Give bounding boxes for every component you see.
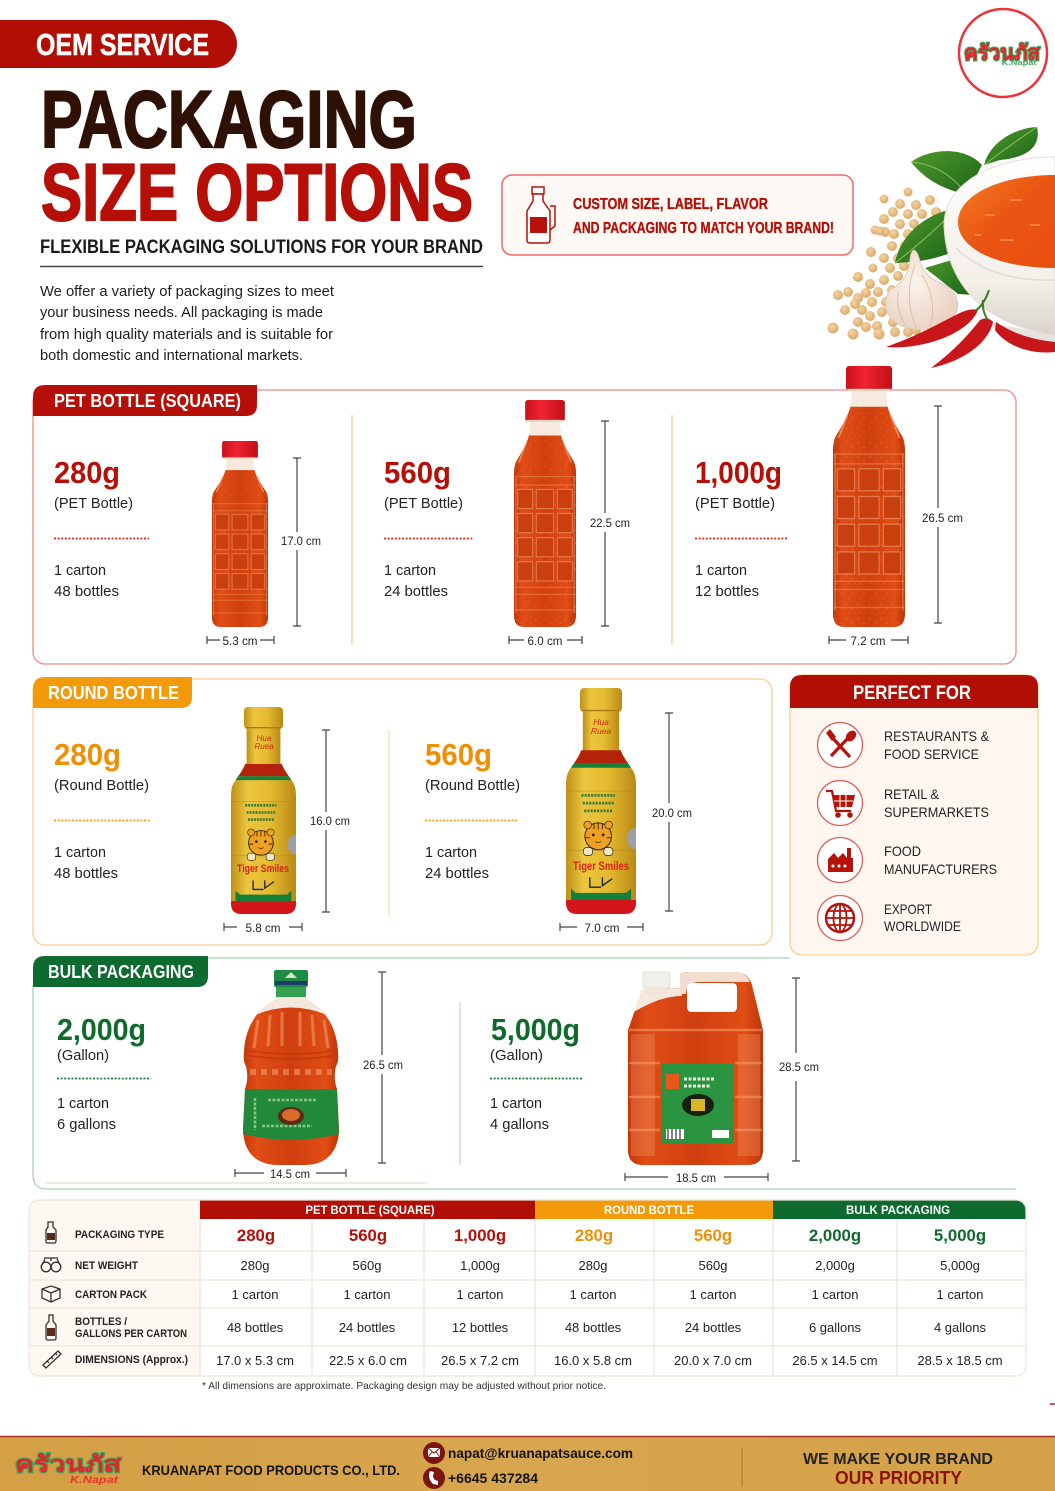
text block: 5000g: 5,000g	[491, 1012, 580, 1047]
tab: bulk heading	[33, 956, 208, 987]
bottle: round 560g: Tiger Smiles	[573, 859, 629, 873]
text: factory: FOOD	[884, 843, 921, 859]
bottle: round 560g: Hua	[593, 717, 609, 727]
carton pack row: 1 carton	[344, 1287, 390, 1302]
carton pack row: 1 carton	[232, 1287, 278, 1302]
dimensions: 5000g: 28.5 cm	[779, 1060, 819, 1074]
text block: PET 560g	[384, 455, 474, 600]
leaves	[895, 127, 1038, 295]
carton pack row: 1 carton	[690, 1287, 736, 1302]
packaging type row: 5,000g	[934, 1226, 986, 1245]
bottles per carton row: 48 bottles	[565, 1320, 622, 1335]
bottle: round 280g: Tiger Smiles	[237, 863, 289, 875]
text block: PET 280g: 1 carton	[54, 562, 106, 579]
text block: round 560g: 24 bottles	[425, 865, 489, 882]
bottles per carton row	[227, 1320, 987, 1335]
packaging type row: 280g	[237, 1226, 275, 1245]
packaging type row: 560g	[349, 1226, 387, 1245]
contact: phone	[423, 1467, 538, 1489]
table headers: ROUND BOTTLE	[604, 1203, 694, 1217]
icon: retail	[818, 780, 862, 826]
dimensions: round 280g: 16.0 cm	[310, 814, 350, 828]
net weight row: 280g	[241, 1258, 269, 1273]
row labels: BOTTLES /	[75, 1316, 127, 1328]
dimensions row: 26.5 x 14.5 cm	[792, 1353, 878, 1368]
row labels: PACKAGING TYPE	[75, 1229, 164, 1241]
dimensions: 280g: 17.0 cm	[281, 534, 321, 548]
dimensions: 560g	[509, 421, 630, 648]
text: restaurants: RESTAURANTS &	[884, 728, 990, 744]
icon: globe	[818, 896, 862, 940]
dimensions: 280g	[207, 458, 321, 648]
tab: PET bottle heading	[33, 385, 257, 416]
dimensions: 560g: 6.0 cm	[528, 634, 562, 648]
row labels: DIMENSIONS (Approx.)	[75, 1354, 188, 1366]
dimensions row: 16.0 x 5.8 cm	[554, 1353, 632, 1368]
dimensions: 2000g	[235, 972, 403, 1181]
bottles per carton row: 48 bottles	[227, 1320, 284, 1335]
badge: OEM service: OEM SERVICE	[36, 27, 209, 62]
text: export: WORLDWIDE	[884, 918, 961, 934]
comparison table	[29, 1200, 1026, 1376]
callout: custom size: AND PACKAGING TO MATCH YOUR BRAND!	[573, 220, 834, 237]
dimensions: 1000g	[829, 406, 963, 648]
text: retail: SUPERMARKETS	[884, 804, 989, 820]
text block: PET 1000g: 1 carton	[695, 562, 747, 579]
carton pack row: 1 carton	[937, 1287, 983, 1302]
heading: perfect for	[790, 675, 1038, 708]
text block: round 560g: (Round Bottle)	[425, 777, 520, 794]
text: restaurants: FOOD SERVICE	[884, 746, 979, 762]
text block: 5000g: 4 gallons	[490, 1116, 549, 1133]
text block: PET 560g: 24 bottles	[384, 583, 448, 600]
bottle: round 280g: Ruea	[254, 742, 274, 751]
dimensions: 5000g	[625, 978, 819, 1185]
illustration: soup bowl with ingredients	[828, 127, 1055, 368]
icon: bottle	[527, 187, 555, 243]
text block: 2000g: 6 gallons	[57, 1116, 116, 1133]
company name: KRUANAPAT FOOD PRODUCTS CO., LTD.	[142, 1462, 400, 1478]
carton pack row: 1 carton	[457, 1287, 503, 1302]
dimensions: 5000g: 18.5 cm	[676, 1171, 716, 1185]
dimensions: 2000g: 14.5 cm	[270, 1167, 310, 1181]
text: restaurants	[884, 728, 990, 762]
logo: round badge: ครัวนภัส	[964, 42, 1040, 65]
carton pack row: 1 carton	[570, 1287, 616, 1302]
intro paragraph: from high quality materials and is suitable for	[40, 326, 333, 343]
dimensions: 560g: 22.5 cm	[590, 516, 630, 530]
bottles per carton row: 6 gallons	[809, 1320, 862, 1335]
packaging type row: 1,000g	[454, 1226, 506, 1245]
contact: email: napat@kruanapatsauce.com	[448, 1445, 633, 1461]
panel: round bottle	[33, 677, 772, 945]
bottles per carton row: 24 bottles	[685, 1320, 742, 1335]
logo: round badge	[959, 9, 1047, 97]
icon: factory	[818, 838, 862, 882]
text: retail: RETAIL &	[884, 786, 940, 802]
row labels	[75, 1229, 188, 1366]
title: SIZE OPTIONS	[41, 148, 473, 238]
contact: phone: +6645 437284	[448, 1470, 538, 1486]
text block: PET 1000g: (PET Bottle)	[695, 495, 775, 512]
bottles per carton row: 12 bottles	[452, 1320, 509, 1335]
text: retail	[884, 786, 989, 820]
footer	[0, 1436, 1055, 1491]
panel: bulk packaging	[33, 956, 1016, 1189]
subtitle: FLEXIBLE PACKAGING SOLUTIONS FOR YOUR BRAND	[40, 237, 483, 258]
row icons	[41, 1222, 61, 1368]
row labels: CARTON PACK	[75, 1289, 147, 1301]
text block: round 280g: 280g	[54, 737, 121, 772]
text: export	[884, 901, 961, 934]
text block: 5000g	[490, 1012, 582, 1133]
text block: 2000g	[57, 1012, 151, 1133]
callout: custom size: CUSTOM SIZE, LABEL, FLAVOR	[573, 196, 768, 213]
panel: PET bottle (square)	[33, 366, 1016, 664]
intro paragraph	[40, 283, 335, 364]
text block: PET 560g: 560g	[384, 455, 451, 490]
intro paragraph: your business needs. All packaging is made	[40, 304, 323, 321]
dimensions row	[216, 1353, 1003, 1368]
bottle: 5000g jug	[628, 972, 763, 1165]
text block: round 280g: 48 bottles	[54, 865, 118, 882]
text block: 2000g: 1 carton	[57, 1095, 109, 1112]
logo: footer: ครัวนภัส	[15, 1451, 122, 1477]
title: PACKAGING	[41, 75, 417, 165]
chilies	[886, 309, 1055, 368]
dimensions row: 26.5 x 7.2 cm	[441, 1353, 519, 1368]
dimensions row: 17.0 x 5.3 cm	[216, 1353, 294, 1368]
dimensions row: 28.5 x 18.5 cm	[917, 1353, 1003, 1368]
text block: round 280g: (Round Bottle)	[54, 777, 149, 794]
row labels: GALLONS PER CARTON	[75, 1328, 187, 1340]
title	[41, 75, 473, 238]
bottle: round 280g	[231, 707, 296, 914]
peas	[828, 188, 941, 340]
text block: 2000g: 2,000g	[57, 1012, 146, 1047]
net weight row: 280g	[579, 1258, 607, 1273]
tab: round bottle heading: ROUND BOTTLE	[48, 683, 179, 703]
dimensions row: 20.0 x 7.0 cm	[674, 1353, 752, 1368]
dimensions: round 280g: 5.8 cm	[246, 921, 280, 935]
text block: round 280g	[54, 737, 150, 882]
text block: PET 280g: 48 bottles	[54, 583, 119, 600]
packaging type row	[237, 1226, 986, 1245]
bowl	[985, 322, 1055, 347]
intro paragraph: both domestic and international markets.	[40, 347, 303, 364]
dimensions: round 560g	[560, 713, 692, 935]
dimensions: round 560g: 20.0 cm	[652, 806, 692, 820]
bottle: PET 280g	[212, 441, 268, 627]
tagline	[803, 1451, 993, 1488]
dimensions: 1000g: 7.2 cm	[850, 634, 886, 648]
text block: PET 560g: 1 carton	[384, 562, 436, 579]
text block: 5000g: (Gallon)	[490, 1047, 543, 1064]
logo: footer: K.Napat	[70, 1475, 119, 1486]
table headers: BULK PACKAGING	[846, 1203, 950, 1217]
logo: round badge: K.Napat	[1002, 60, 1037, 67]
text block: PET 1000g: 12 bottles	[695, 583, 759, 600]
carton pack row: 1 carton	[812, 1287, 858, 1302]
table headers: PET BOTTLE (SQUARE)	[306, 1203, 434, 1217]
tab: PET bottle heading: PET BOTTLE (SQUARE)	[54, 391, 241, 411]
heading: perfect for: PERFECT FOR	[853, 683, 971, 704]
text block: PET 560g: (PET Bottle)	[384, 495, 463, 512]
row labels: NET WEIGHT	[75, 1260, 138, 1272]
text: factory: MANUFACTURERS	[884, 861, 997, 877]
icon: restaurants	[818, 722, 862, 768]
bottle: PET 560g	[514, 400, 576, 627]
bottles per carton row: 4 gallons	[934, 1320, 987, 1335]
text block: PET 280g: 280g	[54, 455, 120, 490]
net weight row	[241, 1258, 980, 1273]
text block: round 560g: 1 carton	[425, 844, 477, 861]
panel: perfect for	[790, 675, 1038, 955]
dimensions: 1000g: 26.5 cm	[922, 511, 963, 525]
text block: 5000g: 1 carton	[490, 1095, 542, 1112]
net weight row: 2,000g	[815, 1258, 855, 1273]
dimensions: 2000g: 26.5 cm	[363, 1058, 403, 1072]
net weight row: 560g	[353, 1258, 381, 1273]
bottle: 2000g gallon	[243, 970, 339, 1165]
text block: PET 1000g: 1,000g	[695, 455, 782, 490]
text block: PET 1000g	[695, 455, 787, 600]
tab: bulk heading: BULK PACKAGING	[48, 962, 194, 982]
packaging type row: 280g	[575, 1226, 613, 1245]
bottle: PET 1000g	[833, 366, 905, 627]
logo: footer	[15, 1451, 122, 1486]
garlic	[885, 250, 958, 329]
dimensions row: 22.5 x 6.0 cm	[329, 1353, 407, 1368]
tab: round bottle heading	[33, 677, 192, 708]
text block: round 560g	[425, 737, 520, 882]
callout: custom size	[502, 175, 853, 255]
bottle: round 560g	[566, 688, 636, 914]
bottle: round 560g: Ruea	[591, 726, 611, 736]
dimensions: round 560g: 7.0 cm	[584, 921, 620, 935]
text block: round 280g: 1 carton	[54, 844, 106, 861]
text block: 2000g: (Gallon)	[57, 1047, 109, 1064]
text: export: EXPORT	[884, 901, 932, 917]
tagline: WE MAKE YOUR BRAND	[803, 1451, 993, 1468]
text block: round 560g: 560g	[425, 737, 492, 772]
contact: email	[423, 1442, 633, 1464]
intro paragraph: We offer a variety of packaging sizes to meet	[40, 283, 335, 300]
text: factory	[884, 843, 997, 877]
net weight row: 5,000g	[940, 1258, 980, 1273]
text block: PET 280g	[54, 455, 149, 600]
net weight row: 1,000g	[460, 1258, 500, 1273]
net weight row: 560g	[699, 1258, 727, 1273]
text block: PET 280g: (PET Bottle)	[54, 495, 133, 512]
footnote: * All dimensions are approximate. Packaging design may be adjusted without prior notice.	[202, 1380, 606, 1392]
bottle: round 280g: Hua	[257, 734, 272, 743]
table headers	[200, 1200, 1026, 1219]
dimensions: round 280g	[224, 730, 350, 935]
dimensions: 280g: 5.3 cm	[222, 634, 258, 648]
tagline: OUR PRIORITY	[835, 1468, 962, 1488]
packaging type row: 2,000g	[809, 1226, 861, 1245]
packaging type row: 560g	[694, 1226, 732, 1245]
badge: OEM service	[0, 20, 237, 68]
bottles per carton row: 24 bottles	[339, 1320, 396, 1335]
carton pack row	[232, 1287, 983, 1302]
